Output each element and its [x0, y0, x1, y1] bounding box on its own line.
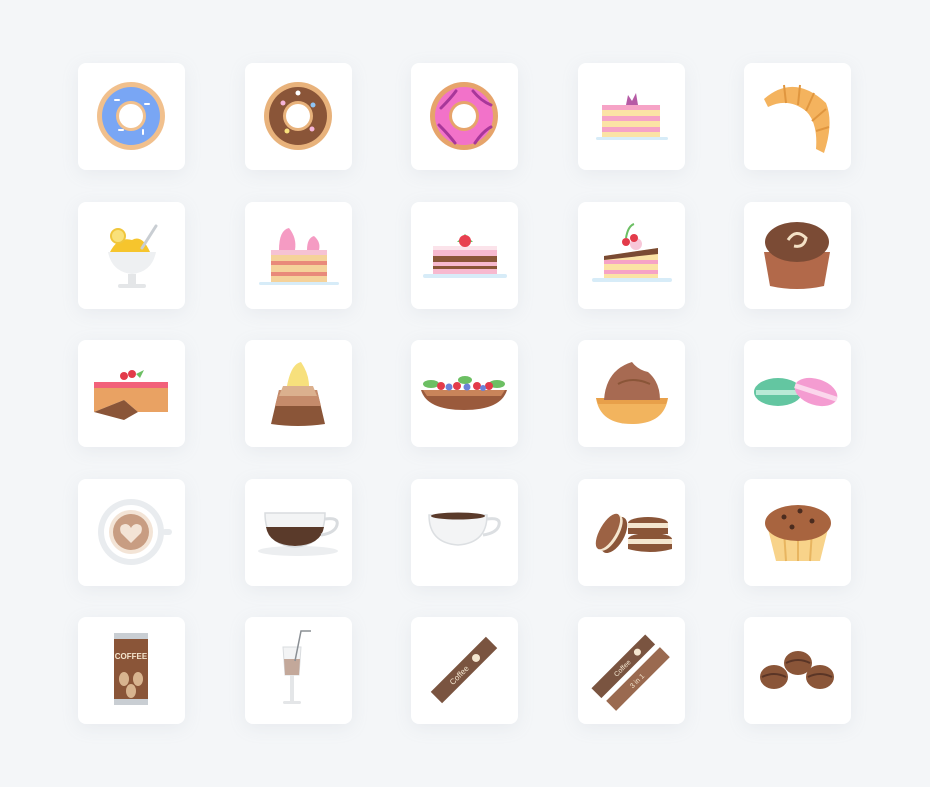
card: ice cream sundae [78, 202, 185, 309]
card: chocolate tart [578, 340, 685, 447]
card: blue donut [78, 63, 185, 170]
card: latte top view [78, 479, 185, 586]
card: glass drink [245, 617, 352, 724]
card: layered cake slice [578, 63, 685, 170]
card: coffee sticks 3 in 1 [578, 617, 685, 724]
card: coffee stick: Coffee [448, 663, 471, 687]
card: macarons [744, 340, 851, 447]
card: muffin [744, 479, 851, 586]
card: sandwich cookies [578, 479, 685, 586]
card: coffee can [78, 617, 185, 724]
card: cake slice with pink cream [245, 202, 352, 309]
card: fruit tart [411, 340, 518, 447]
card: croissant [744, 63, 851, 170]
card: chocolate pudding [245, 340, 352, 447]
card: coffee beans [744, 617, 851, 724]
card: cheesecake [78, 340, 185, 447]
card: cake slice with cherry [578, 202, 685, 309]
card: coffee sticks 3 in 1: Coffee [613, 659, 633, 678]
card: coffee can: COFFEE [115, 652, 148, 661]
card: coffee stick [411, 617, 518, 724]
card: glass coffee cup [245, 479, 352, 586]
card: cake slice with strawberry [411, 202, 518, 309]
card: chocolate cupcake [744, 202, 851, 309]
card: pink donut [411, 63, 518, 170]
card: chocolate donut [245, 63, 352, 170]
card: coffee sticks 3 in 1: 3 in 1 [629, 673, 646, 690]
card: coffee cup [411, 479, 518, 586]
